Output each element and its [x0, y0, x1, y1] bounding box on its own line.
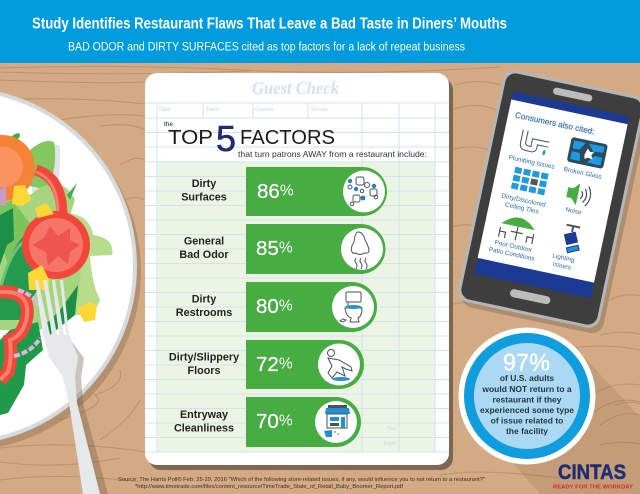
factor: dirty slippery floors 72%: [169, 340, 364, 389]
item: lighting: Lighting: [552, 253, 576, 264]
icon: storefront: [324, 405, 350, 437]
factor: entryway cleanliness 70%: %: [279, 412, 293, 430]
item: broken glass: [563, 137, 608, 181]
item: plumbing issues: Plumbing Issues: [508, 154, 555, 171]
factor: general bad odor 85%: Bad Odor: [179, 249, 229, 261]
factor: entryway cleanliness 70%: [174, 397, 361, 447]
column labels: Tax: [387, 426, 397, 432]
factor: dirty surfaces 86%: Surfaces: [181, 192, 227, 204]
factor: dirty restrooms 80%: [176, 282, 377, 332]
item: ceiling tiles: [499, 165, 553, 217]
tomato slice: [22, 211, 90, 279]
item: noise: Noise: [565, 206, 583, 217]
factor: general bad odor 85%: [179, 224, 386, 274]
factor: dirty surfaces 86%: %: [280, 182, 294, 200]
factor: general bad odor 85%: %: [279, 240, 293, 256]
factor: dirty slippery floors 72%: Floors: [188, 365, 220, 377]
onion rings: [14, 290, 40, 356]
stat circle 97%: experienced some type: [480, 405, 574, 415]
factor: dirty slippery floors 72%: 72: [256, 353, 279, 376]
factor: dirty restrooms 80%: Restrooms: [176, 307, 232, 319]
cintas logo: CINTAS: [558, 461, 626, 484]
item: patio: [488, 213, 542, 263]
item: broken glass: Broken Glass: [563, 166, 602, 181]
heading: top 5 factors: FACTORS: [240, 127, 335, 149]
plate with salad: [0, 87, 141, 451]
stat circle 97%: the facility: [506, 426, 548, 436]
carrot slice: [0, 135, 35, 201]
subtitle: BAD ODOR and DIRTY SURFACES cited as top factors for a lack of repeat business: [68, 40, 465, 54]
item: lighting: [550, 223, 584, 272]
stat circle 97%: would NOT return to a: [481, 384, 572, 394]
item: patio: Poor Outdoor: [494, 239, 534, 254]
heading: top 5 factors: that turn patrons AWAY from a restaurant include:: [238, 149, 427, 159]
factor: general bad odor 85%: General: [184, 236, 224, 248]
heading: top 5 factors: TOP: [168, 127, 213, 149]
factor: dirty surfaces 86%: [181, 167, 387, 216]
item: lighting: Issues: [552, 261, 572, 271]
source note: [118, 476, 485, 490]
icon: slipping person: [328, 350, 352, 381]
corn pieces: [0, 184, 97, 322]
heading: top 5 factors: the: [164, 121, 173, 128]
column labels: Total: [383, 441, 396, 447]
factor: dirty restrooms 80%: Dirty: [192, 294, 216, 306]
title: Study Identifies Restaurant Flaws That Leave a Bad Taste in Diners’ Mouths: [32, 16, 507, 32]
factor: dirty surfaces 86%: 86: [257, 180, 280, 203]
stat circle 97%: of U.S. adults: [500, 373, 554, 383]
icon: dirt particles: [348, 177, 378, 206]
column labels: Server: [311, 107, 329, 113]
factor: general bad odor 85%: 85: [256, 237, 279, 260]
fork: [35, 280, 108, 494]
item: ceiling tiles: Ceiling Tiles: [504, 202, 539, 216]
stat circle 97%: of issue related to: [491, 416, 563, 426]
guest check card: [145, 73, 453, 470]
factor: dirty restrooms 80%: 80: [256, 295, 279, 318]
icon: toilet: [340, 292, 362, 322]
stat circle 97%: restaurant if they: [493, 394, 562, 404]
factor: dirty surfaces 86%: Dirty: [192, 178, 216, 190]
column labels: Date: [159, 107, 171, 113]
factor: entryway cleanliness 70%: Cleanliness: [174, 422, 234, 434]
salad leaves: [0, 133, 112, 415]
item: patio: Patio Conditions: [488, 246, 535, 263]
phone heading: Consumers also cited:: [514, 110, 596, 136]
guest check label: Guest Check: [252, 78, 339, 98]
item: noise: [563, 181, 593, 218]
heading: top 5 factors: 5: [216, 118, 236, 159]
factor: entryway cleanliness 70%: 70: [256, 410, 279, 433]
column labels: Guests: [255, 107, 274, 113]
phone: [455, 68, 640, 335]
header banner: [0, 0, 640, 63]
source note: Source: The Harris Poll® Feb. 25-29, 2016 "Which of the following store-related issues, if any, would influence you to not return to a restaurant?": [118, 476, 485, 483]
heading: top 5 factors: [164, 118, 427, 159]
column labels: Table: [206, 107, 220, 113]
factor: dirty restrooms 80%: %: [279, 298, 293, 314]
cintas logo: READY FOR THE WORKDAY: [553, 484, 633, 490]
item: ceiling tiles: Dirty/Discolored: [501, 193, 547, 209]
column labels: [159, 107, 397, 447]
item: plumbing issues: [508, 128, 561, 171]
stat circle 97%: 97%: [503, 350, 550, 376]
source note: *http://www.timetrade.com/files/content_resource/TimeTrade_State_of_Retail_Baby_Boomer_Report.pdf: [135, 484, 404, 490]
red pepper: [0, 170, 62, 380]
icon: nose: [351, 232, 369, 269]
factor: dirty slippery floors 72%: %: [279, 356, 293, 372]
stat circle 97%: [458, 328, 640, 494]
factor: dirty slippery floors 72%: Dirty/Slippery: [169, 352, 239, 364]
factor: entryway cleanliness 70%: Entryway: [180, 409, 228, 421]
